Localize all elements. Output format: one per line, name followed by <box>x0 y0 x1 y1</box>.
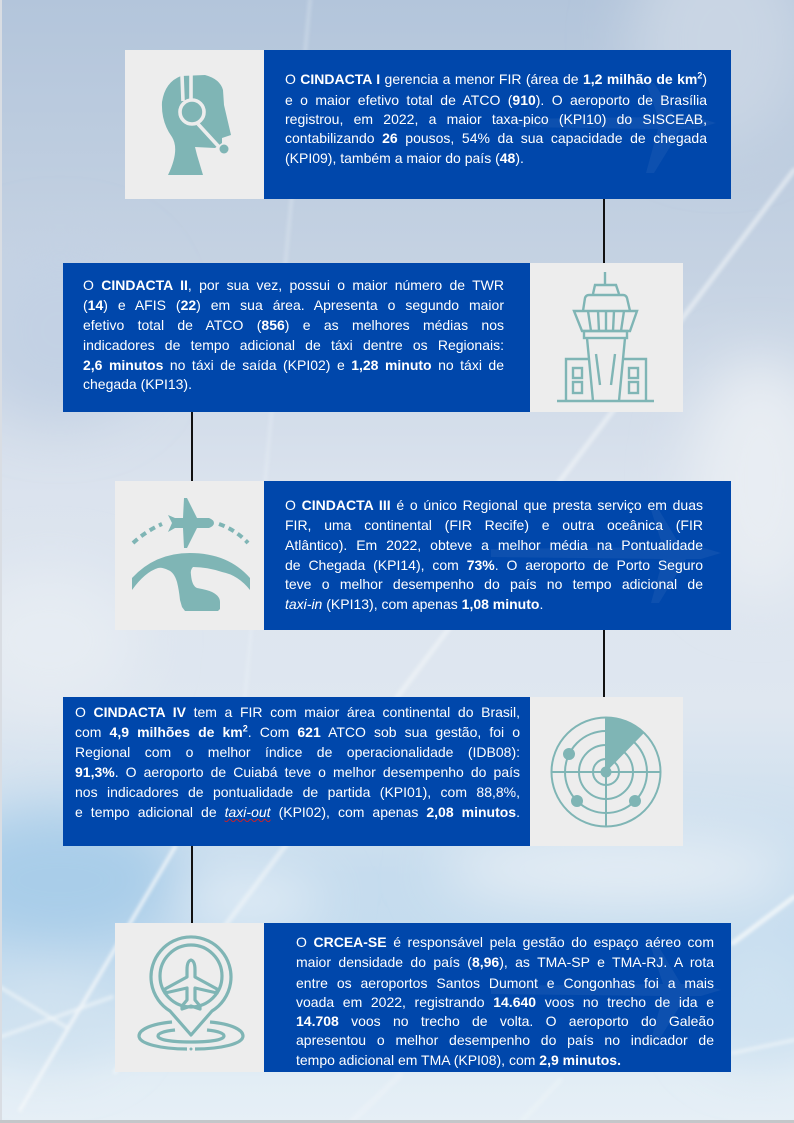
panel: CINDACTA II text <box>63 263 530 412</box>
panel: CINDACTA II icon <box>530 263 683 412</box>
panel: CRCEA-SE text: entre os aeroportos Santos Dumont e Congonhas foi a mais <box>296 975 714 991</box>
panel: CINDACTA II text: (14) e AFIS (22) em sua área. Apresenta o segundo maior <box>83 297 504 313</box>
panel: CINDACTA I text <box>264 50 731 199</box>
panel: CINDACTA II text: efetivo total de ATCO (856) e as melhores médias nos <box>83 317 504 333</box>
panel: CRCEA-SE text: maior densidade do país (8,96), as TMA-SP e TMA-RJ. A rota <box>296 954 714 970</box>
panel: CINDACTA III text: FIR, uma continental (FIR Recife) e outra oceânica (FIR <box>285 517 703 533</box>
panel: CRCEA-SE text: apresentou o melhor desempenho do país no indicador de <box>296 1032 714 1048</box>
panel: CINDACTA III text: de Chegada (KPI14), com 73%. O aeroporto de Porto Seguro <box>285 557 703 573</box>
panel: CINDACTA I text: e o maior efetivo total de ATCO (910). O aeroporto de Brasília <box>285 92 707 108</box>
connector line 2 <box>191 412 192 481</box>
panel: CRCEA-SE text: 14.708 voos no trecho de volta. O aeroporto do Galeão <box>296 1013 714 1029</box>
panel: CINDACTA IV text: com 4,9 milhões de km2. Com 621 ATCO sob sua gestão, foi o <box>75 723 520 740</box>
panel: CINDACTA III icon <box>115 481 264 630</box>
panel: CINDACTA III text: teve o melhor desempenho do país no tempo adicional de <box>285 576 703 592</box>
panel: CINDACTA II text: chegada (KPI13). <box>83 376 192 392</box>
panel: CINDACTA II text: 2,6 minutos no táxi de saída (KPI02) e 1,28 minuto no táxi de <box>83 357 504 373</box>
panel: CINDACTA IV icon <box>530 697 683 846</box>
panel: CINDACTA IV text: Regional com o melhor índice de operacionalidade (IDB08): <box>75 744 520 760</box>
panel: CINDACTA IV text <box>63 697 530 846</box>
panel: CRCEA-SE text <box>264 923 731 1072</box>
panel: CRCEA-SE text: tempo adicional em TMA (KPI08), com 2,9 minutos. <box>296 1052 621 1068</box>
connector line 1 <box>603 199 604 263</box>
panel: CINDACTA III text <box>264 481 731 630</box>
panel: CINDACTA III text: O CINDACTA III é o único Regional que presta serviço em duas <box>285 497 703 513</box>
panel: CRCEA-SE text: O CRCEA-SE é responsável pela gestão do espaço aéreo com <box>296 934 714 950</box>
panel: CINDACTA IV text: nos indicadores de pontualidade de partida (KPI01), com 88,8%, <box>75 784 520 800</box>
panel: CINDACTA I text: registrou, em 2022, a maior taxa-pico (KPI10) do SISCEAB, <box>285 111 707 127</box>
panel: CINDACTA III text: Atlântico). Em 2022, obteve a melhor média na Pontualidade <box>285 537 703 553</box>
panel: CINDACTA IV text: O CINDACTA IV tem a FIR com maior área continental do Brasil, <box>75 704 520 720</box>
connector line 4 <box>191 846 192 923</box>
panel: CINDACTA IV text: e tempo adicional de taxi-out (KPI02), com apenas 2,08 minutos. <box>75 804 520 820</box>
connector line 3 <box>603 630 604 697</box>
panel: CINDACTA I text: O CINDACTA I gerencia a menor FIR (área de 1,2 milhão de km2) <box>285 70 707 87</box>
panel: CINDACTA I text: (KPI09), também a maior do país (48). <box>285 150 524 166</box>
panel: CINDACTA II text: O CINDACTA II, por sua vez, possui o maior número de TWR <box>83 277 504 293</box>
panel: CINDACTA I icon <box>125 50 264 199</box>
panel: CRCEA-SE icon <box>115 923 264 1072</box>
panel: CRCEA-SE text: voada em 2022, registrando 14.640 voos no trecho de ida e <box>296 994 714 1010</box>
panel: CINDACTA I text: contabilizando 26 pousos, 54% da sua capacidade de chegada <box>285 130 707 146</box>
panel: CINDACTA III text: taxi-in (KPI13), com apenas 1,08 minuto. <box>285 596 543 612</box>
panel: CINDACTA IV text: 91,3%. O aeroporto de Cuiabá teve o melhor desempenho do país <box>75 764 520 780</box>
panel: CINDACTA II text: indicadores de tempo adicional de táxi dentre os Regionais: <box>83 337 504 353</box>
